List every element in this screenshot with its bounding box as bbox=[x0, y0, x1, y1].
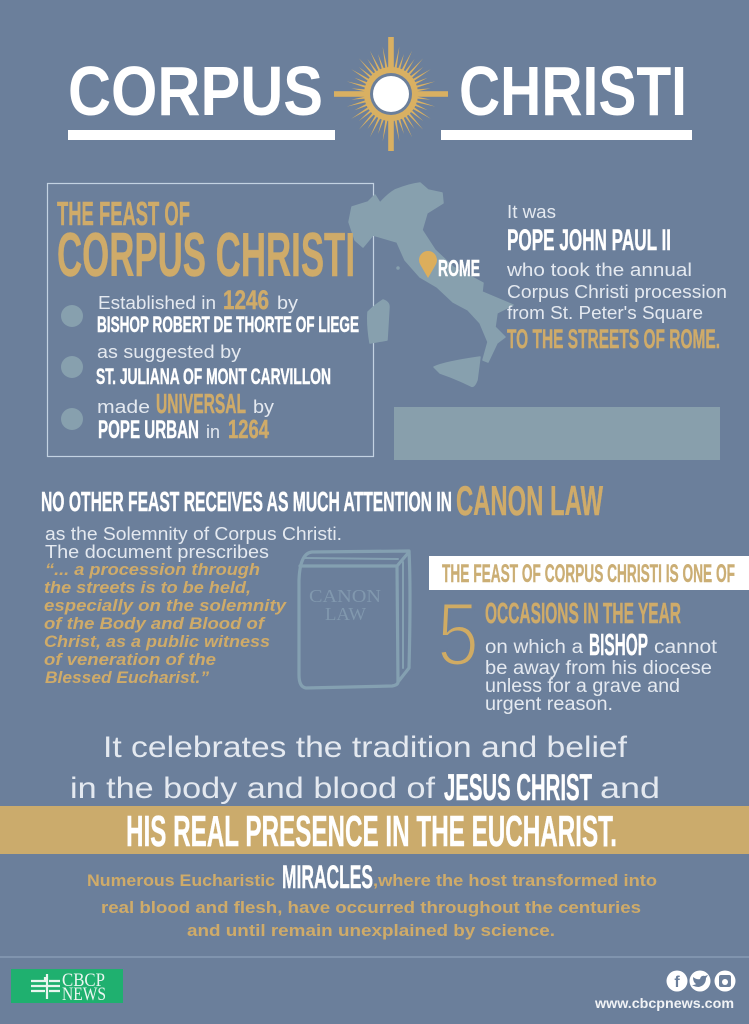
text block: canon law quote bbox=[44, 524, 342, 687]
text block: pope john paul ii bbox=[506, 202, 727, 354]
big number 5: 5 bbox=[437, 585, 479, 685]
icon: sunburst monstrance bbox=[334, 37, 448, 151]
website: www.cbcpnews.com bbox=[594, 995, 734, 1011]
fact 2: st juliana: as suggested by bbox=[97, 342, 241, 362]
book title: CANON bbox=[309, 586, 381, 606]
title word: christi: CHRISTI bbox=[459, 52, 687, 130]
icon: facebook: f bbox=[674, 974, 680, 991]
label: rome: ROME bbox=[438, 255, 480, 281]
text block: miracles: MIRACLES bbox=[282, 859, 373, 895]
fact 2: st juliana bbox=[61, 342, 331, 389]
fact 1: established 1246: BISHOP ROBERT DE THORTE OF LIEGE bbox=[97, 312, 359, 337]
heading: the feast of: THE FEAST OF bbox=[57, 195, 190, 232]
text block: celebrates: It celebrates the tradition and belief bbox=[103, 731, 628, 764]
text block: celebrates: and bbox=[600, 772, 660, 805]
text block: canon law quote: as the Solemnity of Corpus Christi. bbox=[45, 524, 342, 544]
fact 3: made universal: made bbox=[97, 397, 150, 417]
text block: canon law quote: of the Body and Blood of bbox=[44, 614, 267, 633]
text block: canon law quote: The document prescribes bbox=[45, 542, 269, 562]
title word: corpus: CORPUS bbox=[68, 52, 323, 130]
heading: corpus christi: CORPUS CHRISTI bbox=[57, 221, 355, 290]
text block: miracles: real blood and flesh, have occurred throughout the centuries bbox=[101, 898, 641, 917]
logo: cbcp news: NEWS bbox=[62, 984, 106, 1005]
icon: map pin bbox=[419, 251, 437, 278]
fact 1: established 1246 bbox=[61, 285, 359, 337]
text block: canon law quote: Christ, as a public witness bbox=[44, 632, 270, 651]
text block: miracles: and until remain unexplained by science. bbox=[187, 921, 555, 940]
text block: canon law quote: especially on the solemnity bbox=[44, 596, 288, 615]
text block: pope john paul ii: It was bbox=[507, 202, 556, 222]
text block: bishop: cannot bbox=[654, 637, 718, 658]
map of italy bbox=[349, 183, 513, 386]
fact 3: made universal: POPE URBAN bbox=[98, 416, 199, 444]
text block: bishop bbox=[485, 627, 718, 715]
fact 3: made universal bbox=[61, 388, 274, 444]
logo: cbcp news: CBCP bbox=[62, 970, 105, 991]
text block: bishop: BISHOP bbox=[589, 627, 648, 662]
heading: canon law: CANON LAW bbox=[456, 477, 603, 524]
panel: five occasions bbox=[429, 556, 749, 715]
text block: celebrates bbox=[70, 731, 660, 808]
icon: facebook bbox=[666, 970, 688, 992]
book title bbox=[309, 586, 381, 624]
text block: pope john paul ii: who took the annual bbox=[506, 260, 692, 280]
icon: twitter bbox=[690, 970, 710, 992]
text block: celebrates: in the body and blood of bbox=[70, 772, 436, 805]
empty callout box bbox=[394, 407, 720, 460]
fact 3: made universal: in bbox=[206, 422, 220, 442]
title underline left bbox=[68, 130, 335, 140]
fact 3: made universal: 1264 bbox=[228, 414, 269, 444]
white banner bbox=[429, 556, 749, 590]
text block: miracles: ,where the host transformed into bbox=[373, 871, 657, 890]
text block: pope john paul ii: Corpus Christi procession bbox=[507, 282, 727, 302]
text block: celebrates: JESUS CHRIST bbox=[444, 767, 592, 808]
fact 1: established 1246: 1246 bbox=[223, 285, 269, 315]
heading: canon law bbox=[41, 477, 603, 524]
title bbox=[68, 37, 692, 151]
text block: canon law quote: Blessed Eucharist.” bbox=[45, 668, 210, 687]
text block: miracles bbox=[87, 859, 657, 940]
logo: cbcp news bbox=[11, 969, 123, 1005]
text block: canon law quote: of veneration of the bbox=[44, 650, 216, 669]
fact 3: made universal: UNIVERSAL bbox=[156, 388, 246, 419]
panel border bbox=[48, 184, 374, 456]
panel: rome bbox=[394, 202, 727, 460]
text block: canon law quote: the streets is to be held, bbox=[44, 578, 251, 597]
fact 1: established 1246: Established in bbox=[98, 293, 216, 313]
text block: bishop: urgent reason. bbox=[485, 694, 613, 715]
text block: bishop: on which a bbox=[485, 637, 583, 658]
text block: canon law quote: “... a procession through bbox=[45, 560, 260, 579]
icon: instagram bbox=[714, 970, 736, 992]
panel: feast of corpus christi bbox=[48, 183, 513, 456]
social icons and website bbox=[594, 970, 736, 1011]
title underline right bbox=[441, 130, 692, 140]
text block: pope john paul ii: from St. Peter's Square bbox=[507, 303, 703, 323]
text block: bishop: unless for a grave and bbox=[485, 676, 680, 697]
text block: miracles: Numerous Eucharistic bbox=[87, 871, 275, 890]
text block: bishop: be away from his diocese bbox=[485, 658, 712, 679]
icon: canon law book bbox=[299, 551, 410, 688]
fact 2: st juliana: ST. JULIANA OF MONT CARVILLON bbox=[96, 364, 331, 389]
fact 1: established 1246: by bbox=[277, 293, 298, 313]
fact 3: made universal: by bbox=[253, 397, 274, 417]
book title: LAW bbox=[325, 604, 366, 624]
